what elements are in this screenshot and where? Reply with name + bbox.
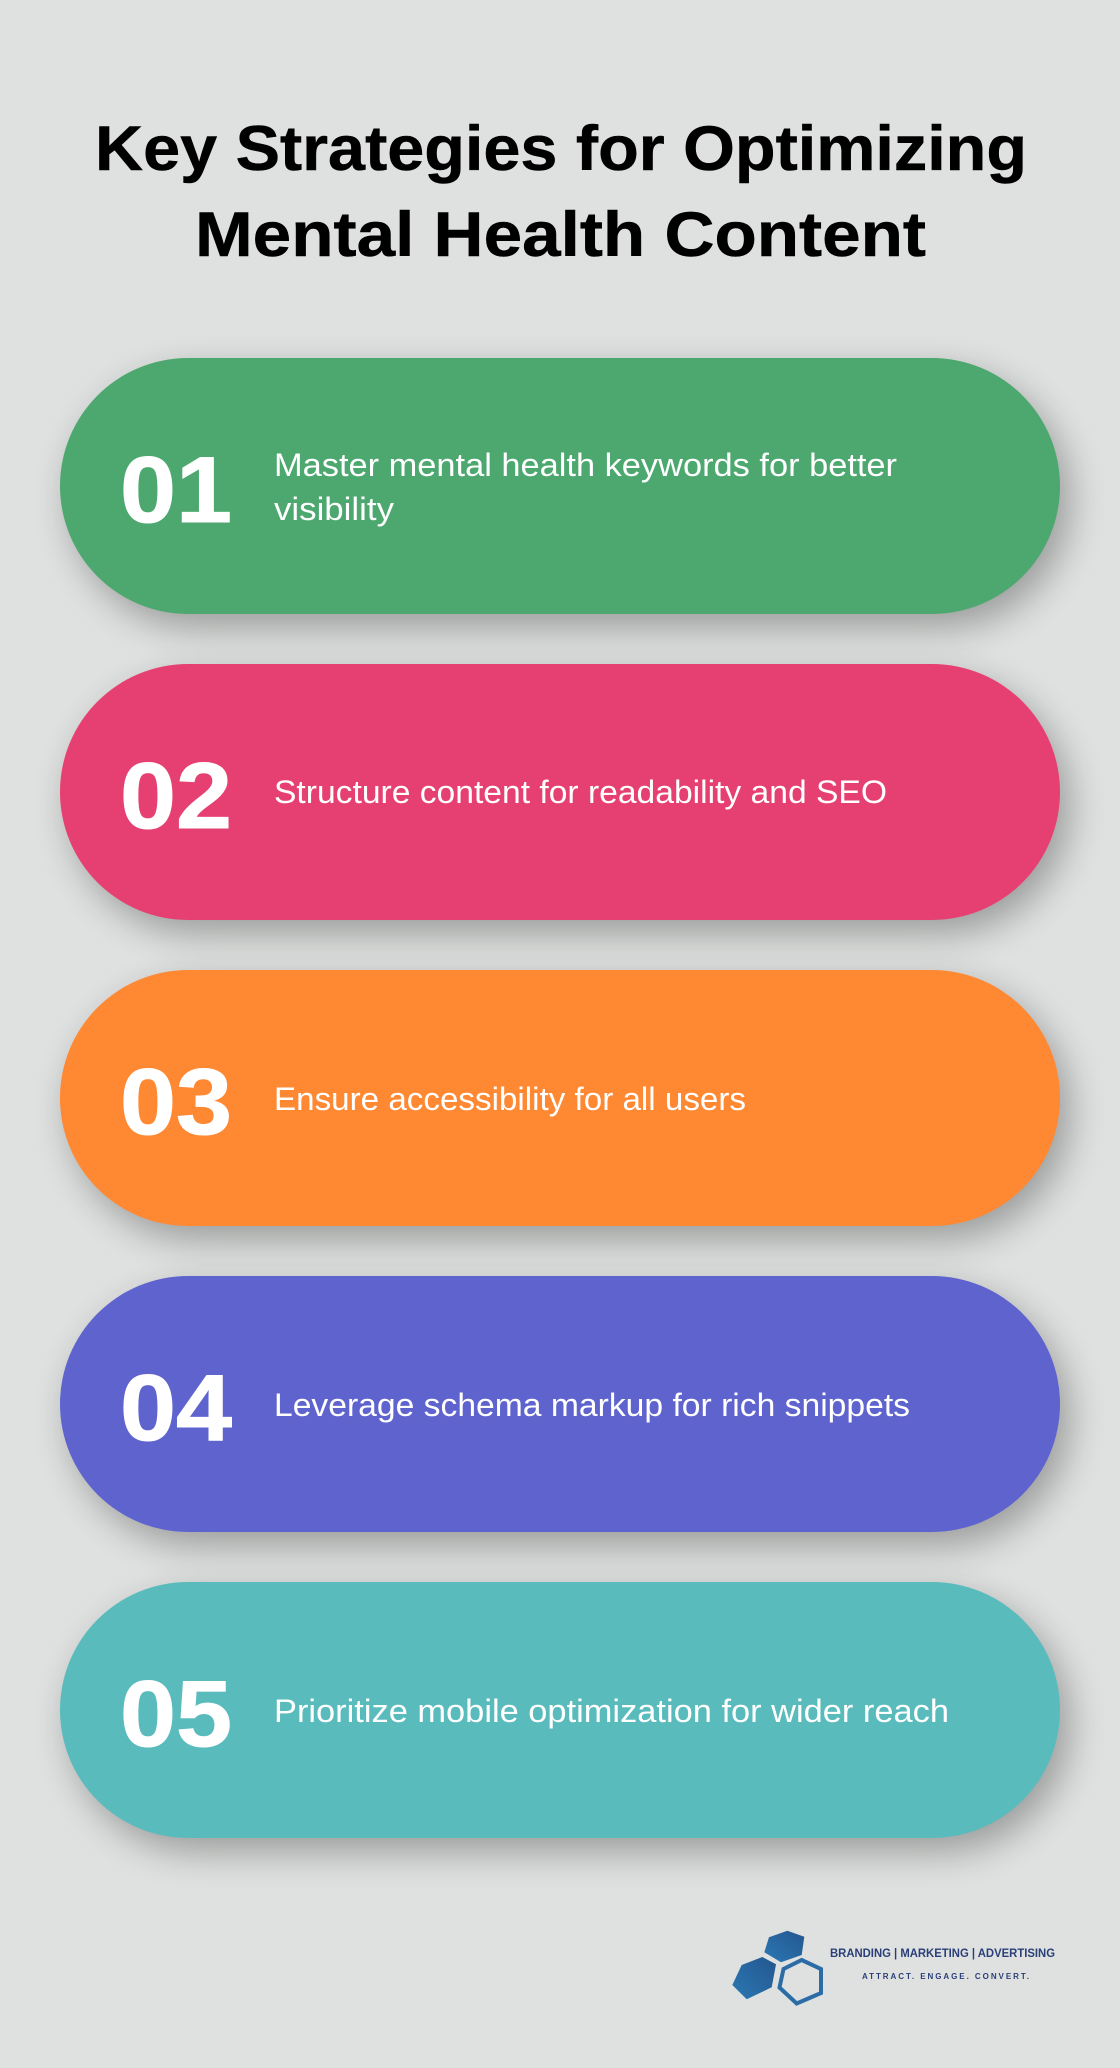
- logo text: BRANDING | MARKETING | ADVERTISING: [830, 1946, 1055, 1960]
- panel: strategy 04: [60, 1276, 1070, 1546]
- panel: strategy 01: 01: [120, 437, 232, 542]
- title: Mental Health Content: [195, 200, 926, 270]
- panel: strategy 02: Structure content for readability and SEO: [274, 774, 887, 810]
- panel: strategy 02: [60, 664, 1070, 934]
- panel: strategy 03: [60, 970, 1070, 1240]
- panel: strategy 05: Prioritize mobile optimization for wider reach: [274, 1693, 949, 1729]
- panel: strategy 01: Master mental health keywords for better: [274, 447, 897, 483]
- panel: strategy 01: visibility: [274, 491, 395, 527]
- icon: hexagon cluster: [732, 1931, 821, 2004]
- panel: strategy 05: [60, 1582, 1070, 1852]
- panel: strategy 03: 03: [120, 1049, 232, 1154]
- title: [95, 114, 1027, 270]
- panel: strategy 01: [60, 358, 1070, 628]
- panel: strategy 03: Ensure accessibility for all users: [274, 1081, 746, 1117]
- logo text: ATTRACT. ENGAGE. CONVERT.: [862, 1972, 1029, 1981]
- panel: strategy 02: 02: [120, 743, 232, 848]
- panel: strategy 04: 04: [120, 1355, 232, 1460]
- logo text: [830, 1946, 1055, 1981]
- panel: strategy 04: Leverage schema markup for rich snippets: [274, 1387, 910, 1423]
- title: Key Strategies for Optimizing: [95, 114, 1027, 184]
- logo: [732, 1931, 1055, 2004]
- panel: strategy 05: 05: [120, 1661, 232, 1766]
